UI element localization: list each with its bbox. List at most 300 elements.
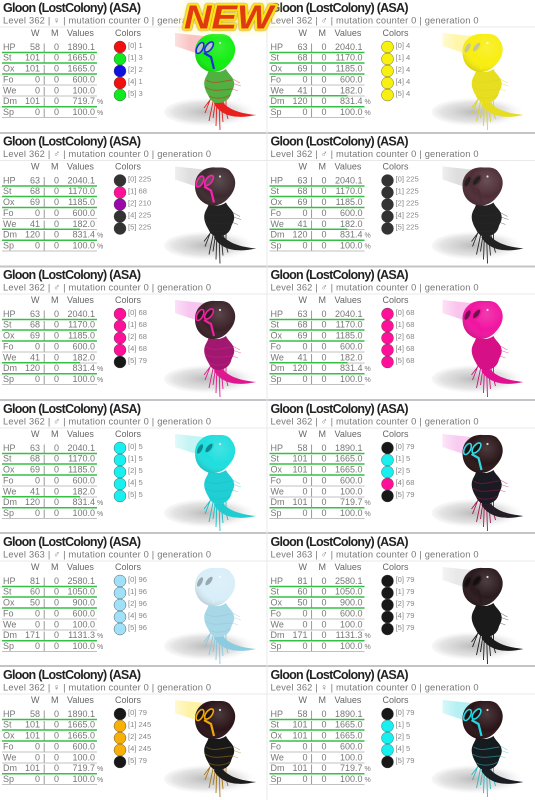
- stats table: 120: [25, 497, 40, 507]
- stats table: 100.0: [340, 774, 362, 784]
- stats table: %: [97, 766, 103, 773]
- level line: Level 362 | ♂ | mutation counter 0 | generation 0: [3, 416, 211, 426]
- stats table: 1170.0: [68, 320, 95, 330]
- stats table: 0: [321, 619, 326, 629]
- stats table: Ox: [270, 464, 283, 474]
- stats table: 41: [297, 85, 308, 95]
- stats table: 0: [302, 508, 308, 518]
- stats table: St: [3, 186, 12, 196]
- stats table: 0: [54, 641, 59, 651]
- stats table: 101: [25, 763, 40, 773]
- stats table: 600.0: [340, 208, 362, 218]
- colour swatches: [1] 5: [396, 720, 410, 729]
- stats table: 0: [321, 186, 326, 196]
- stats table: 0: [54, 363, 59, 373]
- stats table: |: [43, 53, 45, 63]
- stats table: M: [51, 429, 58, 439]
- stats table: Dm: [270, 763, 284, 773]
- stats table: Sp: [3, 774, 14, 784]
- stats table: 63: [30, 309, 40, 319]
- stats table: 0: [321, 208, 326, 218]
- stats table: |: [43, 752, 45, 762]
- colour swatches: [1] 68: [128, 186, 147, 196]
- stats table: %: [97, 633, 103, 640]
- colour swatches: [4] 225: [128, 210, 151, 220]
- stats table: 0: [35, 85, 40, 95]
- stats table: W: [31, 162, 40, 172]
- card: row 3 left: [2, 268, 264, 397]
- stats table: 1050.0: [335, 587, 362, 597]
- stats table: 2040.1: [67, 443, 95, 453]
- stats table: 60: [30, 587, 40, 597]
- stats table: |: [43, 330, 45, 340]
- stats table: 0: [321, 197, 326, 207]
- stats table: 0: [35, 619, 40, 629]
- stats table: HP: [270, 443, 283, 453]
- stats table: 100.0: [72, 752, 95, 762]
- colour swatches: [5] 96: [128, 623, 147, 632]
- stats table: 2040.1: [335, 175, 362, 185]
- stats table: Ox: [270, 64, 283, 74]
- colour swatches: [2] 79: [396, 599, 414, 608]
- stats table: Dm: [3, 763, 17, 773]
- stats table: Values: [334, 28, 362, 38]
- stats table: |: [43, 64, 45, 74]
- stats table: Fo: [270, 608, 281, 618]
- level line: Level 362 | ♀ | mutation counter 0 | generation 0: [3, 682, 211, 692]
- creature: dark head magenta body: [164, 300, 264, 397]
- stats table: Colors: [115, 429, 142, 439]
- stats table: 0: [321, 475, 326, 485]
- stats table: 1170.0: [336, 320, 362, 330]
- stats table: Colors: [382, 562, 409, 572]
- card: row 4 left: [2, 402, 264, 531]
- stats table: |: [43, 208, 45, 218]
- stats table: M: [51, 295, 58, 305]
- stats table: 0: [54, 341, 59, 351]
- creature: black gloon with cyan tendrils: [432, 700, 532, 797]
- stats table: 2040.1: [67, 309, 95, 319]
- stats table: |: [310, 720, 313, 730]
- stats table: 100.0: [72, 508, 95, 518]
- stats table: |: [310, 497, 313, 507]
- stats table: 831.4: [340, 230, 362, 240]
- colour swatches: [5] 4: [396, 89, 410, 98]
- title: Gloon (LostColony) (ASA): [270, 668, 408, 682]
- stats table: 100.0: [340, 374, 362, 384]
- stats table: Ox: [3, 330, 15, 340]
- stats table: W: [298, 28, 308, 38]
- stats table: M: [318, 295, 326, 305]
- stats table: 0: [35, 374, 40, 384]
- stats table: W: [298, 162, 308, 172]
- stats table: 600.0: [340, 74, 362, 84]
- stats table: 68: [30, 320, 40, 330]
- stats table: We: [270, 486, 284, 496]
- stats table: 0: [54, 74, 59, 84]
- stats table: 50: [297, 598, 308, 608]
- colour swatches: [4] 96: [128, 611, 147, 620]
- stats table: 120: [292, 363, 308, 373]
- colour swatches: [4] 68: [128, 344, 147, 353]
- stats table: 0: [302, 608, 308, 618]
- stats table: 0: [302, 475, 308, 485]
- stats table: 0: [35, 774, 40, 784]
- stats table: 41: [297, 352, 308, 362]
- stats table: |: [310, 443, 313, 453]
- card: row 3 right: [270, 268, 532, 397]
- stats table: |: [310, 641, 313, 651]
- stats table: Colors: [382, 695, 409, 705]
- stats table: 100.0: [72, 107, 95, 117]
- stats table: W: [31, 295, 40, 305]
- stats table: |: [43, 85, 45, 95]
- stats table: 0: [321, 42, 326, 52]
- colour swatches: [0] 68: [396, 308, 414, 317]
- stats table: 0: [321, 720, 326, 730]
- stats table: 0: [54, 709, 59, 719]
- stats table: 101: [292, 720, 308, 730]
- title: Gloon (LostColony) (ASA): [270, 535, 408, 549]
- stats table: 101: [25, 64, 40, 74]
- stats table: Colors: [382, 28, 409, 38]
- stats table: 0: [35, 74, 40, 84]
- stats table: 1185.0: [68, 197, 95, 207]
- stats table: Colors: [115, 162, 142, 172]
- stats table: |: [43, 774, 45, 784]
- stats table: 0: [54, 64, 59, 74]
- stats table: 0: [321, 341, 326, 351]
- stats table: Values: [334, 562, 362, 572]
- creature: dark gloon with magenta markings: [164, 166, 264, 264]
- stats table: 600.0: [72, 741, 95, 751]
- colour swatches: [0] 96: [128, 575, 147, 584]
- stats table: |: [310, 208, 313, 218]
- stats table: 1131.3: [336, 630, 362, 640]
- stats table: St: [3, 53, 12, 63]
- stats table: |: [43, 341, 45, 351]
- stats table: We: [3, 219, 16, 229]
- colour swatches: [5] 79: [128, 756, 147, 765]
- stats table: 171: [25, 630, 40, 640]
- stats table: 600.0: [340, 475, 362, 485]
- colour swatches: [114, 708, 151, 768]
- stats table: 900.0: [72, 598, 95, 608]
- stats table: 0: [35, 508, 40, 518]
- colour swatches: [0] 79: [396, 575, 414, 584]
- creature: black gloon with orange markings: [164, 700, 264, 797]
- colour swatches: [2] 5: [128, 466, 143, 475]
- stats table: 1170.0: [336, 186, 362, 196]
- stats table: 41: [30, 486, 40, 496]
- stats table: %: [364, 500, 371, 507]
- stats table: 100.0: [340, 619, 362, 629]
- stats table: HP: [270, 175, 283, 185]
- colour swatches: [382, 308, 414, 368]
- stats table: 0: [302, 774, 308, 784]
- stats table: %: [364, 633, 371, 640]
- stats table: Colors: [115, 562, 142, 572]
- colour swatches: [2] 2: [128, 65, 143, 74]
- stats table: We: [3, 85, 16, 95]
- stats table: |: [310, 186, 313, 196]
- level line: Level 362 | ♂ | mutation counter 0 | generation 0: [270, 16, 478, 26]
- stats table: 0: [302, 240, 308, 250]
- stats table: %: [97, 511, 103, 518]
- stats table: Colors: [115, 28, 142, 38]
- stats table: 0: [302, 208, 308, 218]
- stats table: 69: [297, 64, 308, 74]
- creature: magenta gloon: [432, 300, 532, 397]
- stats table: 1665.0: [67, 64, 95, 74]
- stats table: 0: [321, 219, 326, 229]
- stats table: 0: [321, 53, 326, 63]
- stats table: 101: [25, 96, 40, 106]
- stats table: |: [310, 230, 313, 240]
- stats table: Sp: [270, 508, 282, 518]
- title: Gloon (LostColony) (ASA): [270, 1, 408, 15]
- stats table: 831.4: [72, 497, 95, 507]
- stats table: Values: [334, 295, 362, 305]
- stats table: 0: [35, 741, 40, 751]
- stats table: Colors: [382, 429, 409, 439]
- colour swatches: [0] 79: [128, 708, 147, 717]
- stats table: 171: [292, 630, 308, 640]
- stats table: 0: [321, 763, 326, 773]
- stats table: 0: [321, 175, 326, 185]
- stats table: 69: [30, 330, 40, 340]
- stats table: 0: [321, 363, 326, 373]
- stats table: |: [310, 64, 313, 74]
- colour swatches: [2] 96: [128, 599, 147, 608]
- stats table: 100.0: [72, 641, 95, 651]
- stats table: 719.7: [72, 96, 95, 106]
- stats table: 100.0: [340, 240, 362, 250]
- stats table: |: [310, 709, 313, 719]
- stats table: 58: [297, 709, 308, 719]
- stats table: 100.0: [72, 619, 95, 629]
- colour swatches: [382, 41, 410, 101]
- stats table: 0: [35, 608, 40, 618]
- stats table: 101: [25, 53, 40, 63]
- stats table: 600.0: [72, 208, 95, 218]
- stats table: 2040.1: [335, 42, 362, 52]
- stats table: 1665.0: [335, 720, 362, 730]
- stats table: 58: [30, 709, 40, 719]
- colour swatches: [1] 96: [128, 587, 147, 596]
- stats table: M: [51, 695, 58, 705]
- stats table: 0: [321, 641, 326, 651]
- colour swatches: [4] 5: [128, 478, 143, 487]
- stats table: |: [310, 475, 313, 485]
- colour swatches: [4] 79: [396, 611, 414, 620]
- stats table: 0: [321, 630, 326, 640]
- stats table: 0: [54, 230, 59, 240]
- stats table: [2, 429, 142, 518]
- stats table: W: [298, 295, 308, 305]
- stats table: Ox: [3, 464, 15, 474]
- title: Gloon (LostColony) (ASA): [3, 402, 141, 416]
- stats table: 600.0: [340, 741, 362, 751]
- stats table: 41: [30, 352, 40, 362]
- stats table: %: [97, 110, 103, 117]
- stats table: 100.0: [340, 641, 362, 651]
- colour swatches: [1] 5: [128, 454, 143, 463]
- stats table: 0: [321, 64, 326, 74]
- stats table: [270, 295, 409, 384]
- stats table: 182.0: [72, 352, 95, 362]
- stats table: St: [270, 186, 280, 196]
- colour swatches: [5] 225: [128, 222, 151, 232]
- stats table: |: [43, 464, 45, 474]
- colour swatches: [1] 225: [396, 186, 419, 196]
- stats table: Fo: [270, 74, 281, 84]
- stats table: Fo: [270, 341, 281, 351]
- stats table: [2, 295, 142, 384]
- stats table: 2040.1: [67, 175, 95, 185]
- colour swatches: [0] 4: [396, 41, 410, 50]
- stats table: 0: [321, 497, 326, 507]
- stats table: 101: [25, 730, 40, 740]
- stats table: |: [310, 752, 313, 762]
- stats table: HP: [3, 42, 16, 52]
- stats table: |: [310, 96, 313, 106]
- stats table: |: [310, 363, 313, 373]
- stats table: Colors: [115, 295, 142, 305]
- stats table: %: [97, 99, 103, 106]
- stats table: Values: [67, 162, 94, 172]
- stats table: 0: [54, 741, 59, 751]
- stats table: |: [43, 630, 45, 640]
- stats table: 69: [30, 464, 40, 474]
- stats table: St: [3, 454, 12, 464]
- stats table: St: [270, 454, 280, 464]
- colour swatches: [1] 68: [396, 320, 414, 329]
- stats table: 0: [321, 587, 326, 597]
- stats table: 1890.1: [67, 709, 95, 719]
- stats table: |: [43, 186, 45, 196]
- stats table: We: [270, 352, 284, 362]
- stats table: |: [43, 443, 45, 453]
- stats table: |: [43, 587, 45, 597]
- stats table: 1170.0: [68, 454, 95, 464]
- colour swatches: [0] 79: [396, 708, 414, 717]
- level line: Level 362 | ♂ | mutation counter 0 | generation 0: [270, 416, 478, 426]
- colour swatches: [5] 79: [128, 356, 147, 365]
- stats table: 0: [321, 774, 326, 784]
- stats table: 0: [54, 352, 59, 362]
- stats table: 0: [35, 641, 40, 651]
- stats table: M: [51, 28, 58, 38]
- stats table: |: [310, 53, 313, 63]
- title: Gloon (LostColony) (ASA): [270, 134, 408, 148]
- colour swatches: [2] 225: [396, 198, 419, 208]
- stats table: Fo: [3, 341, 14, 351]
- stats table: 0: [54, 53, 59, 63]
- card: row 4 right: [270, 402, 532, 531]
- colour swatches: [382, 575, 414, 635]
- stats table: 0: [321, 486, 326, 496]
- stats table: |: [43, 508, 45, 518]
- stats table: 81: [30, 576, 40, 586]
- stats table: Values: [67, 695, 94, 705]
- colour swatches: [5] 225: [396, 222, 419, 232]
- stats table: 69: [297, 330, 308, 340]
- creature: green gloon: [164, 33, 264, 130]
- stats table: HP: [3, 709, 16, 719]
- stats table: 50: [30, 598, 40, 608]
- stats table: St: [3, 720, 12, 730]
- stats table: Fo: [3, 741, 14, 751]
- stats table: 101: [292, 497, 308, 507]
- card: row 1 left: [2, 1, 264, 130]
- stats table: [270, 562, 409, 652]
- stats table: 0: [321, 96, 326, 106]
- stats table: We: [270, 85, 284, 95]
- stats table: 0: [302, 641, 308, 651]
- stats table: M: [318, 28, 326, 38]
- stats table: HP: [270, 576, 283, 586]
- stats table: %: [97, 244, 103, 250]
- stats table: Values: [67, 28, 94, 38]
- stats table: M: [318, 562, 326, 572]
- stats table: |: [310, 107, 313, 117]
- stats table: 0: [321, 320, 326, 330]
- stats table: Ox: [270, 197, 283, 207]
- stats table: 68: [30, 186, 40, 196]
- stats table: St: [270, 53, 280, 63]
- stats table: Colors: [115, 695, 142, 705]
- stats table: 1665.0: [335, 454, 362, 464]
- stats table: 831.4: [72, 230, 95, 240]
- stats table: |: [310, 219, 313, 229]
- card: row 1 right: [270, 1, 532, 130]
- colour swatches: [114, 174, 151, 234]
- stats table: Sp: [270, 240, 282, 250]
- stats table: Dm: [270, 96, 284, 106]
- stats table: 0: [321, 454, 326, 464]
- stats table: |: [310, 240, 313, 250]
- stats table: |: [43, 454, 45, 464]
- stats table: Ox: [3, 64, 15, 74]
- stats table: 1131.3: [68, 630, 95, 640]
- stats table: |: [310, 197, 313, 207]
- stats table: %: [97, 366, 103, 373]
- stats table: Colors: [382, 295, 409, 305]
- stats table: |: [43, 219, 45, 229]
- stats table: 0: [321, 85, 326, 95]
- stats table: Ox: [3, 598, 15, 608]
- stats table: 0: [35, 208, 40, 218]
- stats table: 0: [302, 341, 308, 351]
- stats table: Ox: [3, 197, 15, 207]
- stats table: St: [270, 320, 280, 330]
- stats table: We: [3, 486, 16, 496]
- stats table: We: [3, 752, 16, 762]
- stats table: %: [364, 366, 371, 373]
- stats table: Sp: [270, 641, 282, 651]
- stats table: 0: [321, 330, 326, 340]
- title: Gloon (LostColony) (ASA): [3, 268, 141, 282]
- colour swatches: [4] 68: [396, 344, 414, 353]
- stats table: M: [51, 562, 58, 572]
- stats table: 58: [297, 443, 308, 453]
- creature: black gloon with cyan markings: [432, 434, 532, 531]
- stats table: |: [310, 486, 313, 496]
- stats table: 0: [321, 374, 326, 384]
- colour swatches: [4] 5: [396, 744, 410, 753]
- colour swatches: [2] 4: [396, 65, 410, 74]
